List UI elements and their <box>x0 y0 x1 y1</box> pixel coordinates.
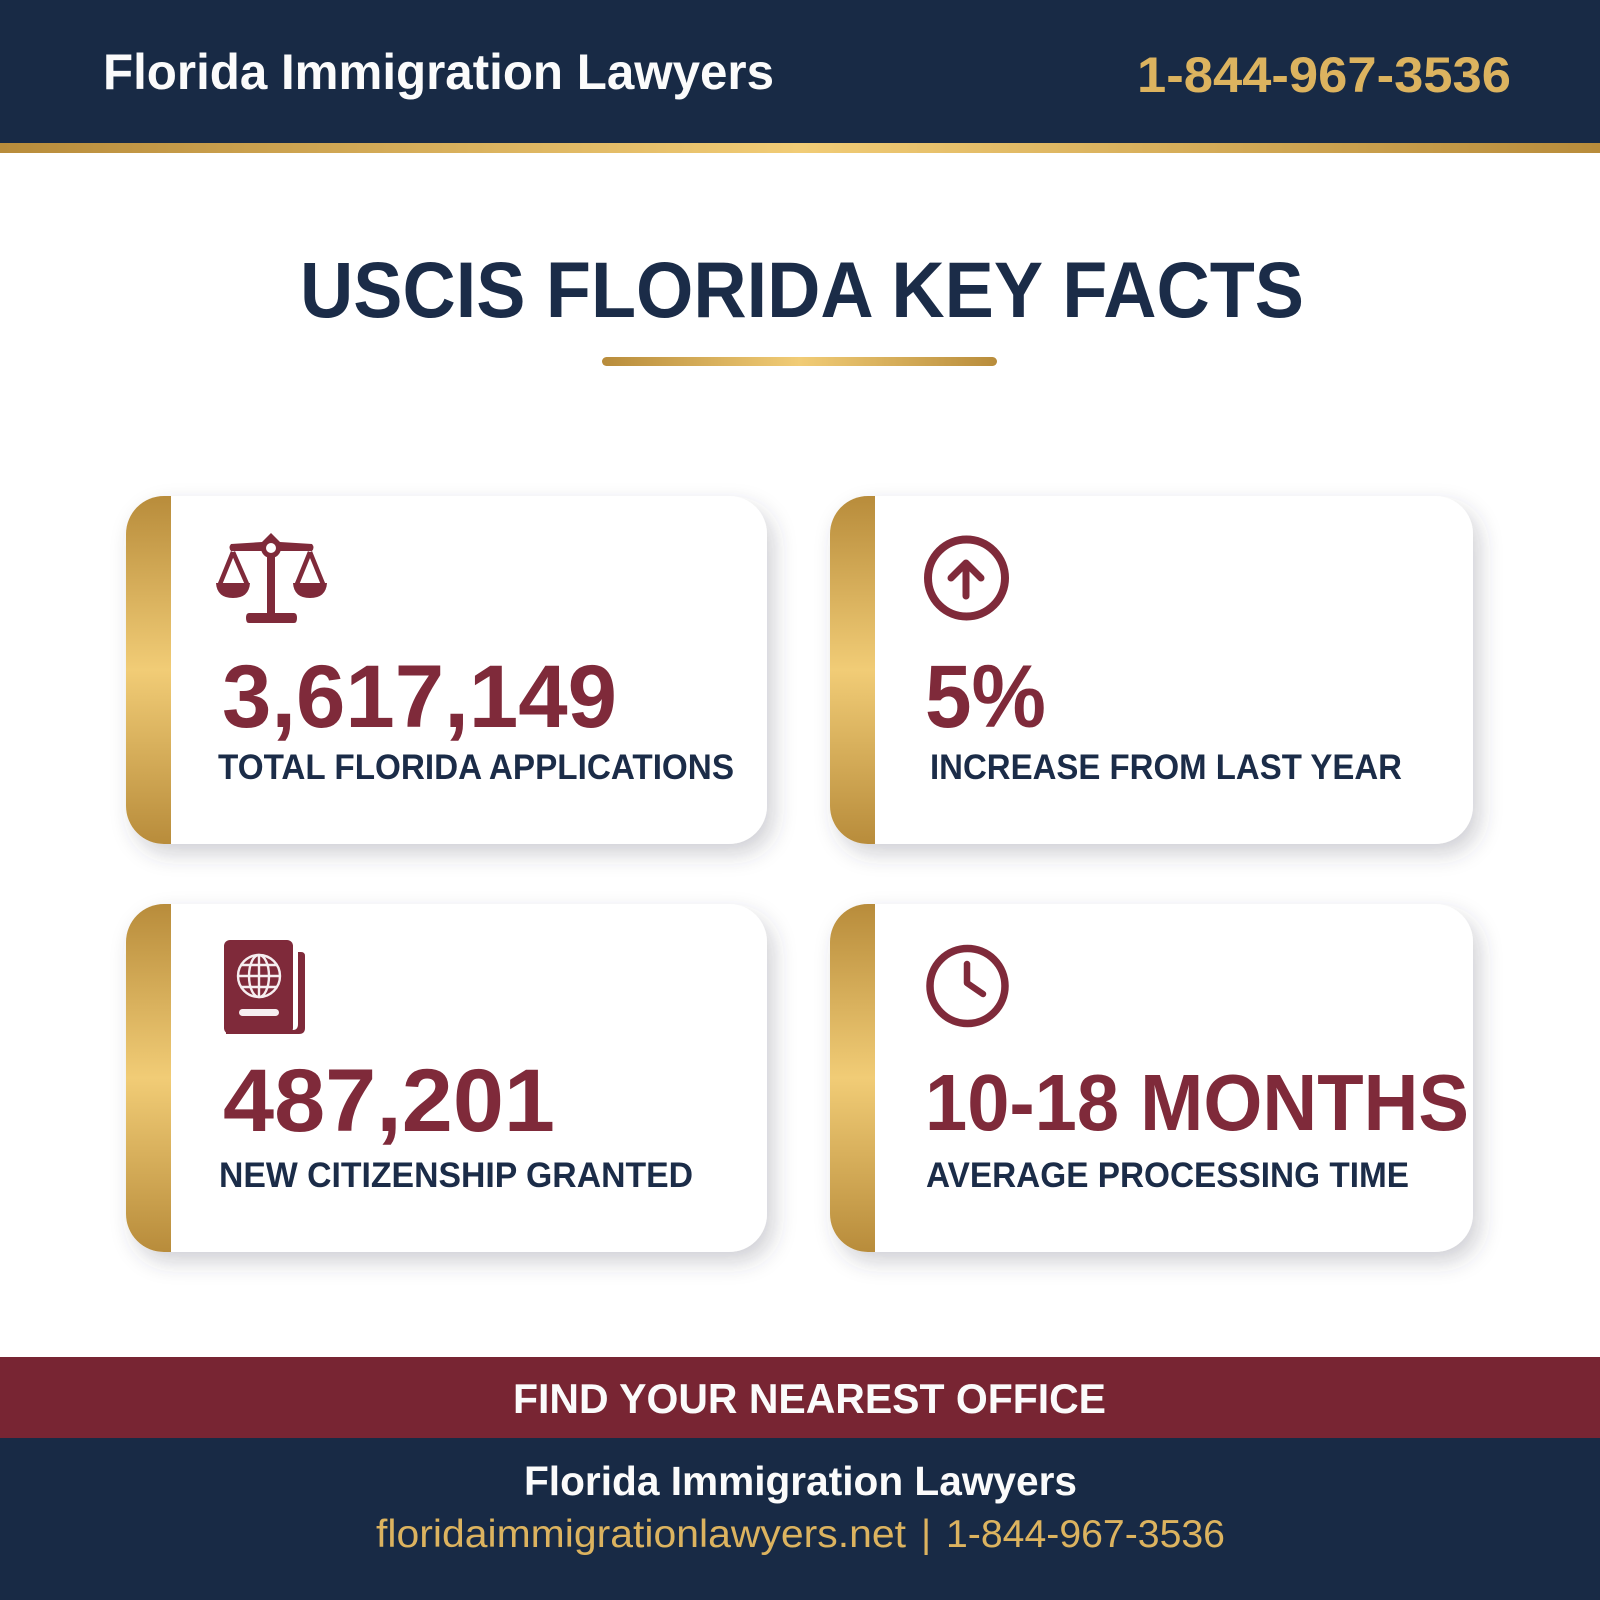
statistic: 3,617,149 <box>222 646 617 746</box>
footer <box>0 1438 1600 1600</box>
panel: yearly increase <box>830 496 1473 844</box>
title <box>300 245 1304 366</box>
icon: up arrow in circle <box>928 540 1005 616</box>
footer contact line: 1-844-967-3536 <box>946 1513 1225 1556</box>
icon: scales of justice <box>216 533 327 623</box>
header bar <box>0 0 1600 153</box>
panel: total applications <box>126 496 767 844</box>
title: USCIS FLORIDA KEY FACTS <box>300 245 1304 334</box>
footer contact line: floridaimmigrationlawyers.net <box>376 1513 906 1556</box>
label: AVERAGE PROCESSING TIME <box>926 1156 1409 1195</box>
title underline <box>602 357 997 366</box>
label: INCREASE FROM LAST YEAR <box>930 748 1402 787</box>
label: NEW CITIZENSHIP GRANTED <box>219 1156 693 1195</box>
header phone number: 1-844-967-3536 <box>1137 47 1511 103</box>
statistic: 487,201 <box>223 1050 555 1150</box>
call to action band <box>0 1357 1600 1438</box>
panel: processing time <box>830 904 1473 1252</box>
header firm name: Florida Immigration Lawyers <box>103 44 774 100</box>
call to action band: FIND YOUR NEAREST OFFICE <box>513 1375 1106 1422</box>
footer contact line <box>376 1513 1225 1556</box>
panel: new citizenship <box>126 904 767 1252</box>
icon: passport <box>224 940 305 1034</box>
icon: clock <box>930 948 1005 1024</box>
label: TOTAL FLORIDA APPLICATIONS <box>218 748 734 787</box>
statistic: 10-18 MONTHS <box>925 1058 1469 1147</box>
footer firm name: Florida Immigration Lawyers <box>524 1458 1077 1504</box>
footer contact line: | <box>921 1513 931 1556</box>
statistic: 5% <box>925 646 1046 746</box>
